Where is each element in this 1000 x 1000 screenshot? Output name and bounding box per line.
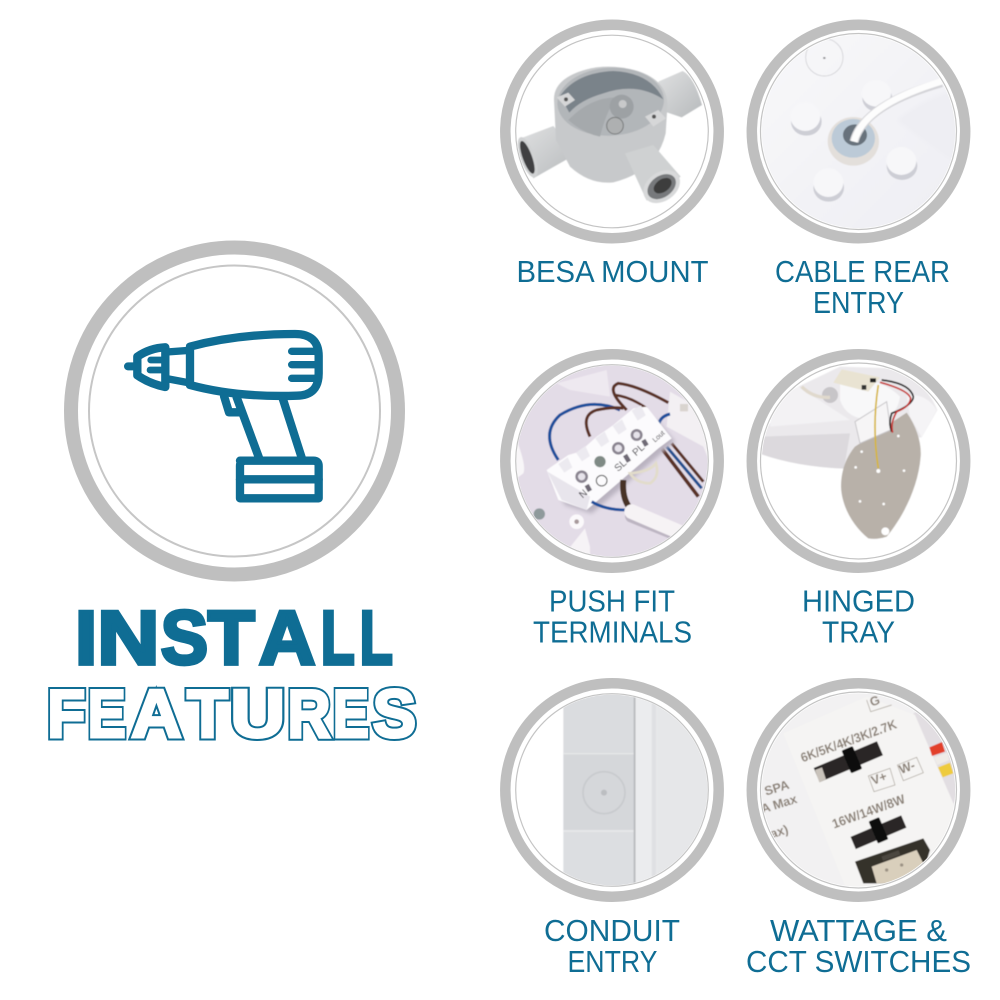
label: cable rear entry [775, 254, 950, 320]
label: push fit terminals [533, 584, 692, 650]
photo: driver label with slide switches: 16W/14W/8W [830, 791, 908, 831]
heading: INSTALL: L [360, 596, 393, 681]
heading: INSTALL: A [259, 596, 315, 681]
heading: FEATURES: U [230, 676, 285, 752]
heading: FEATURES: U [230, 676, 285, 752]
heading: FEATURES: A [131, 676, 182, 752]
heading: INSTALL: T [208, 596, 255, 681]
label: hinged tray: HINGED [802, 584, 915, 618]
label: push fit terminals: TERMINALS [533, 614, 692, 650]
heading: FEATURES: E [333, 676, 369, 752]
photo: driver label with slide switches: A Max [759, 792, 799, 816]
label: wattage and cct switches [746, 913, 971, 979]
photo: terminal block with wires: N [577, 488, 590, 501]
photo: rear of luminaire with cable [762, 35, 955, 228]
photo: driver label with slide switches: SPA [763, 778, 791, 799]
label: conduit entry [544, 913, 680, 979]
heading: FEATURES: S [373, 676, 416, 752]
photo: driver label with slide switches: ax) [768, 822, 790, 841]
photo: terminal block with wires: SL [613, 458, 629, 474]
heading: FEATURES: E [88, 676, 126, 752]
panel: cable rear entry [752, 25, 965, 320]
heading: INSTALL: L [321, 596, 355, 681]
label: hinged tray: TRAY [822, 614, 895, 650]
label: hinged tray [802, 584, 915, 650]
ring: besa mount [505, 25, 719, 238]
heading: FEATURES: E [88, 676, 126, 752]
label: besa mount: BESA MOUNT [516, 254, 709, 289]
label: wattage and cct switches: CCT SWITCHES [746, 944, 971, 979]
heading: INSTALL: I [75, 596, 97, 681]
label: conduit entry: ENTRY [568, 944, 658, 979]
photo: terminal block with wires: PL [631, 442, 647, 459]
label: push fit terminals: PUSH FIT [549, 584, 675, 618]
heading: FEATURES: R [287, 676, 331, 752]
heading: FEATURES: E [333, 676, 369, 752]
heading: INSTALL: S [161, 596, 208, 681]
ring: push fit terminals [505, 354, 719, 568]
heading: FEATURES: T [187, 676, 228, 752]
panel: conduit entry [505, 683, 723, 979]
photo: driver label with slide switches: V+ [869, 769, 889, 788]
ring: hinged tray [752, 354, 965, 568]
label: wattage and cct switches: WATTAGE & [770, 913, 947, 948]
panel: hinged tray [752, 354, 965, 650]
label: conduit entry: CONDUIT [544, 913, 680, 948]
heading: FEATURES: R [287, 676, 331, 752]
panel: install features [47, 248, 416, 752]
label: cable rear entry: CABLE REAR [775, 254, 950, 289]
photo: conduit knockout on housing [563, 694, 708, 886]
heading: INSTALL: N [97, 596, 159, 681]
heading: FEATURES: F [47, 676, 85, 752]
heading: FEATURES: S [373, 676, 416, 752]
ring: cable rear entry [752, 25, 965, 238]
icon: drill in double ring [71, 248, 398, 574]
heading: FEATURES: A [131, 676, 182, 752]
photo: terminal block with wires [517, 366, 708, 556]
ring: wattage and cct switches [752, 683, 965, 897]
photo: hinged gear tray [762, 366, 937, 540]
heading: FEATURES: T [187, 676, 228, 752]
label: cable rear entry: ENTRY [813, 285, 904, 320]
photo: driver label with slide switches: G [868, 693, 882, 709]
ring: conduit entry [505, 683, 719, 897]
heading: FEATURES: F [47, 676, 85, 752]
heading: FEATURES [47, 676, 416, 752]
photo: driver label with slide switches: 6K/5K/4K/3K/2.7K [799, 716, 899, 765]
panel: push fit terminals [505, 354, 719, 650]
panel: wattage and cct switches [746, 683, 971, 979]
photo: driver label with slide switches: W- [897, 758, 917, 777]
photo: terminal block with wires: Lout [652, 430, 666, 444]
photo: galvanised conduit box [513, 65, 702, 210]
photo: driver label with slide switches [762, 694, 956, 886]
panel: besa mount [505, 25, 719, 289]
